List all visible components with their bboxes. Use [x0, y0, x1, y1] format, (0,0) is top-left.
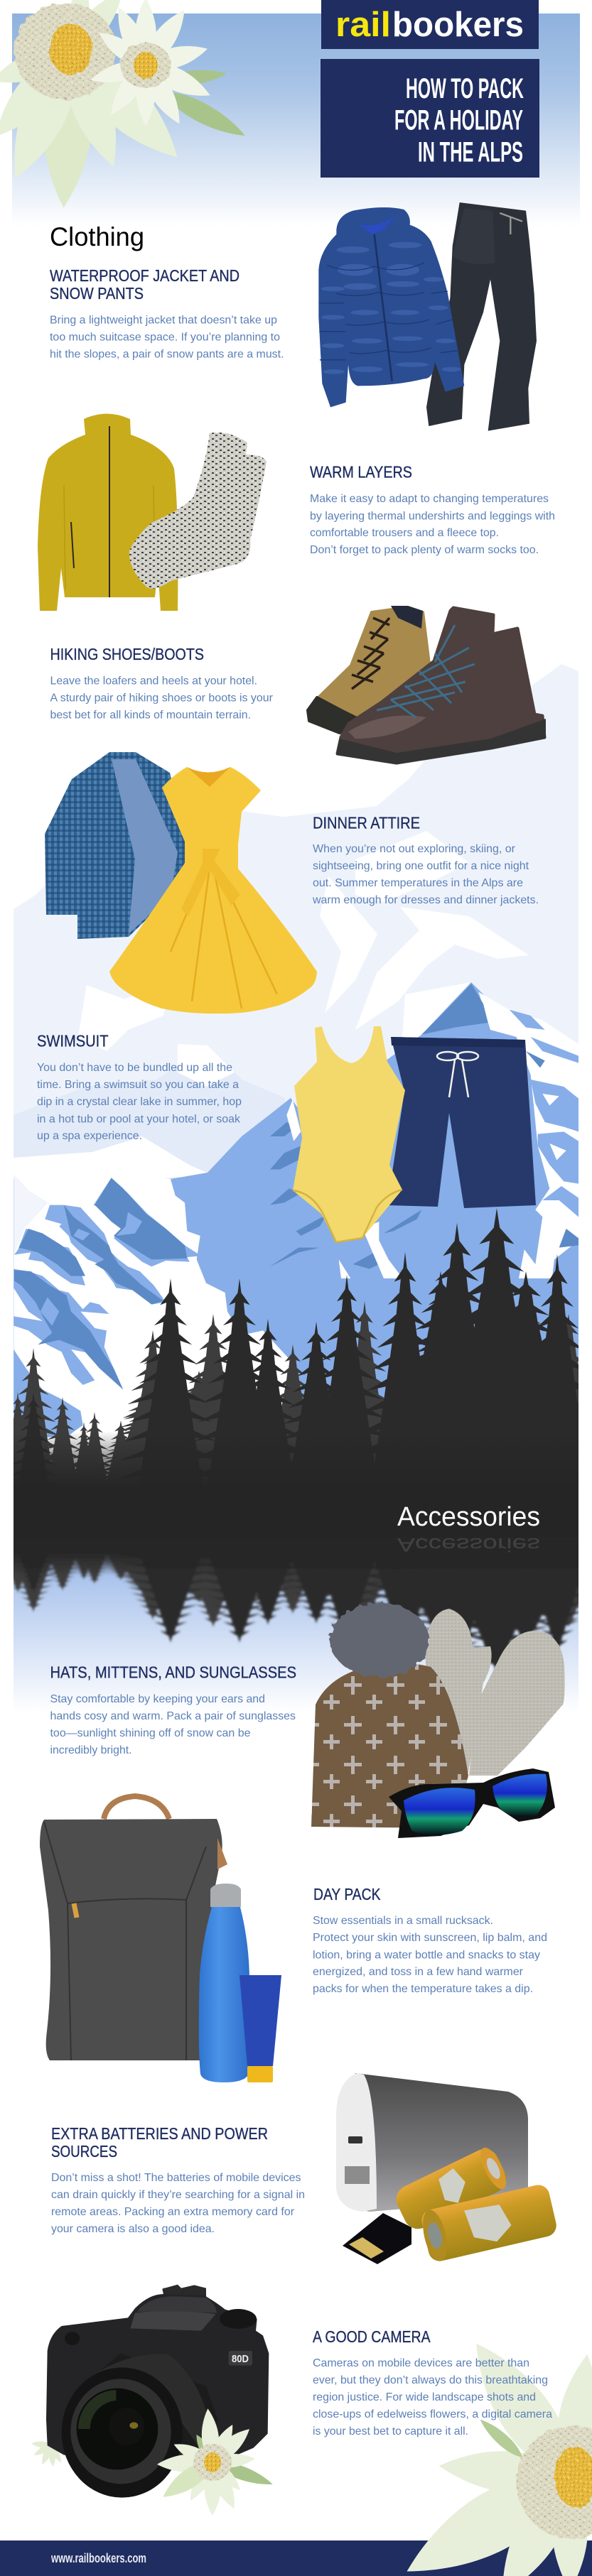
text: swimsuit: in a hot tub or pool at your hotel, or soak [37, 1113, 241, 1125]
text: hiking shoes: Leave the loafers and heels at your hotel. [50, 675, 257, 688]
footer band [0, 2540, 592, 2576]
text: warm layers: Make it easy to adapt to changing temperatures [310, 493, 549, 505]
text: warm layers: Don’t forget to pack plenty of warm socks too. [310, 544, 539, 556]
text: waterproof jacket: too much suitcase space. If you’re planning to [50, 331, 280, 344]
text: dinner attire: DINNER ATTIRE [313, 813, 420, 832]
text: dinner attire: When you’re not out exploring, skiing, or [313, 843, 516, 855]
text: hiking shoes: HIKING SHOES/BOOTS [50, 645, 204, 663]
text: hats mittens sunglasses: Stay comfortable by keeping your ears and [50, 1693, 265, 1705]
text: hiking shoes: A sturdy pair of hiking shoes or boots is your [50, 692, 274, 705]
boots image [308, 606, 546, 764]
panel: clothing [37, 202, 555, 1242]
text: hats mittens sunglasses: too—sunlight shining off of snow can be [50, 1727, 251, 1739]
text: warm layers: WARM LAYERS [310, 463, 412, 482]
text: day pack: energized, and toss in a few hand warmer [313, 1966, 524, 1978]
title box [321, 59, 539, 178]
pale background mountains [14, 664, 578, 1179]
text: a good camera: Cameras on mobile devices are better than [313, 2357, 529, 2369]
dinner outfit image [45, 752, 317, 1013]
heading: Accessories: Accessories [397, 1534, 540, 1555]
text: waterproof jacket: hit the slopes, a pair of snow pants are a must. [50, 349, 284, 361]
swimwear image [293, 1026, 536, 1242]
text: hats mittens sunglasses: HATS, MITTENS, AND SUNGLASSES [50, 1663, 296, 1682]
text: hats mittens sunglasses [50, 1663, 296, 1756]
text: day pack: Stow essentials in a small rucksack. [313, 1915, 493, 1927]
jacket and pants image [318, 202, 537, 431]
forest silhouette [0, 1208, 592, 1538]
text: hats mittens sunglasses: hands cosy and warm. Pack a pair of sunglasses [50, 1710, 296, 1722]
text: swimsuit [37, 1032, 242, 1142]
text: a good camera: close-ups of edelweiss flowers, a digital camera [313, 2408, 552, 2420]
power bank, batteries and memory card image [336, 2073, 559, 2264]
brand logo box: rail [335, 6, 391, 44]
text: warm layers: by layering thermal undershirts and leggings with [310, 510, 555, 522]
text: a good camera [313, 2327, 552, 2438]
text: extra batteries: can drain quickly if they’re searching for a signal in [51, 2189, 305, 2201]
camera image [31, 2285, 275, 2516]
text: swimsuit: up a spa experience. [37, 1130, 142, 1142]
text: warm layers [310, 463, 555, 556]
camera image: 80D [232, 2353, 249, 2365]
heading: Clothing: Clothing [50, 222, 144, 251]
text: extra batteries: your camera is also a good idea. [51, 2223, 215, 2235]
backpack, bottle and tube image [40, 1796, 281, 2082]
text: swimsuit: dip in a crystal clear lake in summer, hop [37, 1096, 242, 1108]
text: day pack [313, 1885, 547, 1995]
text: swimsuit: You don’t have to be bundled up all the [37, 1062, 232, 1074]
brand logo box [321, 0, 539, 49]
snow: main peak right flank [270, 984, 578, 1278]
foreground blue mountains [14, 982, 578, 1449]
text: day pack: DAY PACK [313, 1885, 381, 1903]
text: day pack: lotion, bring a water bottle and snacks to stay [313, 1949, 540, 1962]
text: day pack: Protect your skin with sunscreen, lip balm, and [313, 1932, 547, 1944]
text: waterproof jacket: WATERPROOF JACKET AND [50, 266, 240, 285]
text: waterproof jacket: Bring a lightweight jacket that doesn’t take up [50, 314, 277, 326]
heading: Accessories: Accessories [397, 1502, 540, 1532]
text: waterproof jacket [50, 266, 284, 361]
text: extra batteries: SOURCES [51, 2142, 117, 2161]
text: day pack: packs for when the temperature takes a dip. [313, 1983, 533, 1995]
panel: accessories [0, 1603, 592, 2576]
snow: left massif [14, 1165, 291, 1449]
text: extra batteries: EXTRA BATTERIES AND POWER [51, 2124, 268, 2143]
hat, mittens and sunglasses image [311, 1603, 565, 1838]
title box: IN THE ALPS [418, 137, 523, 168]
icon: edelweiss flower bottom right [392, 2329, 592, 2576]
text: a good camera: A GOOD CAMERA [313, 2327, 431, 2346]
text: hiking shoes: best bet for all kinds of mountain terrain. [50, 709, 251, 721]
text: hiking shoes [50, 645, 274, 721]
heading: Accessories [397, 1502, 540, 1555]
text: swimsuit: SWIMSUIT [37, 1032, 108, 1050]
text: a good camera: region justice. For wide landscape shots and [313, 2391, 536, 2403]
text: warm layers: comfortable trousers and a fleece top. [310, 527, 499, 539]
footer band: www.railbookers.com [50, 2551, 146, 2565]
text: dinner attire: out. Summer temperatures in the Alps are [313, 877, 523, 889]
lake reflection [14, 1538, 578, 1700]
text: dinner attire: warm enough for dresses and dinner jackets. [312, 894, 539, 906]
text: extra batteries: Don’t miss a shot! The batteries of mobile devices [51, 2172, 301, 2184]
text: dinner attire: sightseeing, bring one outfit for a nice night [313, 860, 529, 872]
header sky gradient panel [12, 13, 580, 227]
text: dinner attire [312, 813, 539, 906]
text: extra batteries: remote areas. Packing an extra memory card for [51, 2206, 295, 2218]
text: a good camera: ever, but they don’t always do this breathtaking [313, 2374, 548, 2386]
text: swimsuit: time. Bring a swimsuit so you can take a [37, 1079, 239, 1091]
text: waterproof jacket: SNOW PANTS [50, 284, 144, 303]
text: a good camera: is your best bet to capture it all. [313, 2425, 468, 2438]
brand logo box: bookers [392, 6, 524, 44]
icon: edelweiss flower top left [0, 0, 249, 210]
text: extra batteries [51, 2124, 305, 2235]
fleece and socks image [38, 413, 267, 611]
text: hats mittens sunglasses: incredibly bright. [50, 1744, 132, 1756]
